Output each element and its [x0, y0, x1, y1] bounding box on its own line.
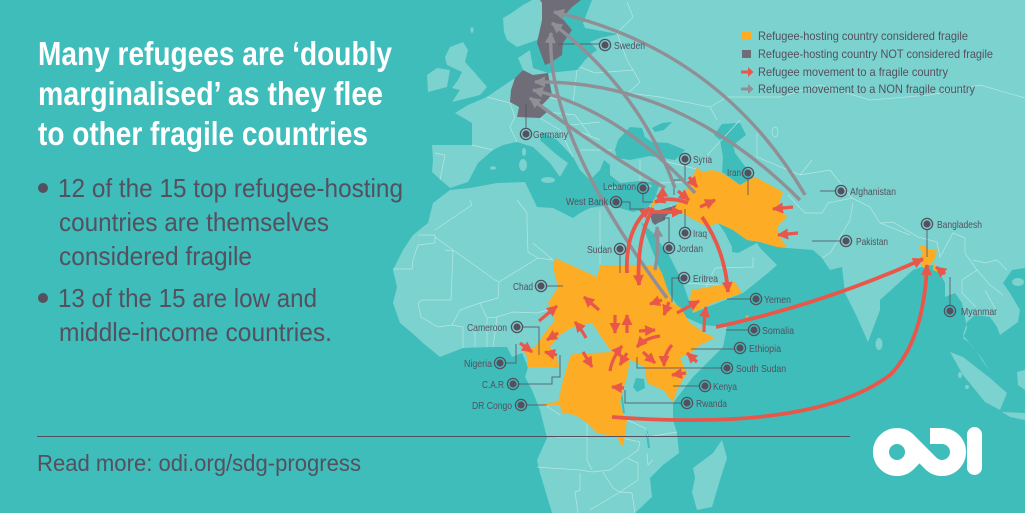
- country markers and labels: Eritrea: [693, 273, 718, 285]
- country: Bangladesh: [918, 245, 937, 268]
- bullet list: 13 of the 15 are low and: [58, 283, 317, 313]
- country: Jordan and neighbours: [650, 205, 677, 225]
- bullet list: 12 of the 15 top refugee-hosting: [58, 173, 403, 203]
- read more link: Read more: odi.org/sdg-progress: [37, 450, 361, 476]
- country: Myanmar strip: [933, 260, 938, 272]
- leader lines: [506, 44, 950, 405]
- country markers and labels: Bangladesh: [937, 219, 982, 231]
- country markers and labels: DR Congo: [472, 400, 512, 412]
- bullet list: [38, 173, 403, 347]
- bullet list: middle-income countries.: [59, 317, 332, 347]
- map: non-fragile host countries in grey: [510, 0, 677, 225]
- country markers and labels: Yemen: [764, 294, 791, 306]
- title: [38, 35, 393, 152]
- country markers and labels: Iran: [727, 167, 741, 179]
- country markers and labels: Ethiopia: [749, 343, 781, 355]
- title: Many refugees are ‘doubly: [38, 35, 393, 72]
- country: Sweden: [537, 0, 581, 65]
- country markers and labels: Sudan: [587, 244, 612, 256]
- country markers and labels: Kenya: [713, 381, 737, 393]
- map: land masses: [393, 0, 1025, 513]
- country markers and labels: Jordan: [677, 243, 703, 255]
- country markers and labels: Germany: [533, 129, 569, 141]
- country markers and labels: West Bank: [566, 196, 609, 208]
- country markers and labels: Pakistan: [856, 236, 888, 248]
- country markers and labels: Myanmar: [961, 306, 997, 318]
- country group: Sudan, Chad, Ethiopia, Kenya, Cameroon and DR Congo: [522, 258, 715, 447]
- country markers and labels: Nigeria: [464, 358, 492, 370]
- country markers and labels: Afghanistan: [850, 186, 896, 198]
- legend: Refugee movement to a fragile country: [758, 65, 948, 79]
- country markers and labels: Lebanon: [603, 181, 636, 193]
- title: marginalised’ as they flee: [38, 75, 383, 112]
- country markers and labels: Sweden: [614, 40, 645, 52]
- country markers and labels: Rwanda: [696, 398, 727, 410]
- country markers and labels: Chad: [513, 281, 533, 293]
- country: Lebanon: [651, 199, 657, 207]
- legend: Refugee movement to a NON fragile country: [758, 82, 975, 96]
- country: Germany: [510, 70, 552, 118]
- country markers and labels: C.A.R: [482, 379, 504, 391]
- country markers and labels: [464, 39, 997, 412]
- logo: ODI: [881, 427, 982, 475]
- title: to other fragile countries: [38, 115, 368, 152]
- map: country borders: [393, 2, 1025, 513]
- legend: Refugee-hosting country NOT considered fragile: [758, 47, 993, 61]
- grey arrows: movement to non-fragile countries: [530, 12, 805, 298]
- legend: [741, 29, 993, 96]
- map: inland seas and lakes: [615, 122, 778, 448]
- bullet list: considered fragile: [59, 241, 252, 271]
- map: fragile host countries in orange: [522, 167, 938, 447]
- country markers and labels: Iraq: [693, 228, 707, 240]
- legend: Refugee-hosting country considered fragile: [758, 29, 968, 43]
- small red arrows: [520, 177, 945, 388]
- bullet list: countries are themselves: [59, 207, 329, 237]
- country markers and labels: Somalia: [762, 325, 794, 337]
- country: Yemen: [690, 282, 742, 313]
- country markers and labels: Cameroon: [467, 322, 507, 334]
- country group: Iran and Iraq: [673, 167, 787, 248]
- country markers and labels: South Sudan: [736, 363, 786, 375]
- red arrows: movement to fragile countries: [612, 199, 927, 420]
- country markers and labels: Syria: [693, 154, 712, 166]
